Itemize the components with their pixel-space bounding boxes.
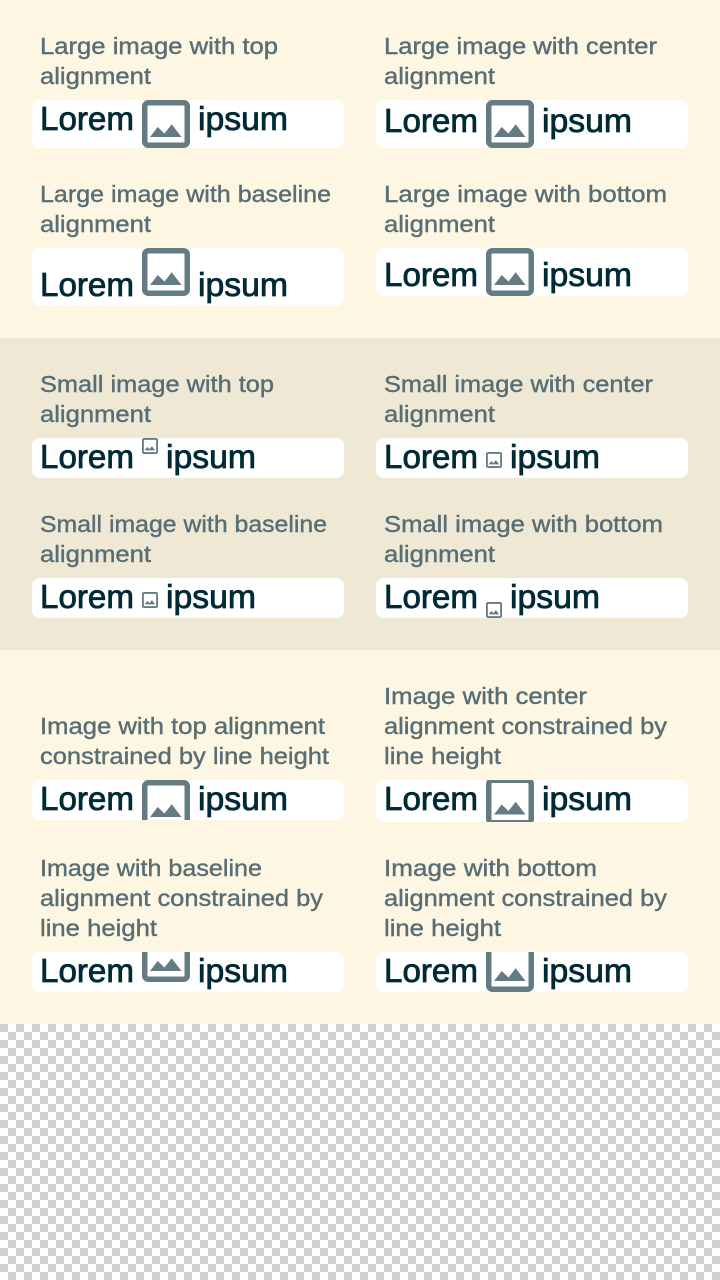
small baseline alignment sample bbox=[32, 578, 344, 618]
constrained center alignment label: line height bbox=[384, 743, 502, 769]
constrained top alignment sample bbox=[32, 780, 344, 825]
constrained center alignment label: alignment constrained by bbox=[384, 713, 668, 739]
small center alignment sample bbox=[376, 438, 688, 478]
large baseline alignment label: Large image with baseline bbox=[40, 181, 331, 207]
constrained bottom alignment sample: ipsum bbox=[542, 952, 632, 989]
constrained bottom alignment label: alignment constrained by bbox=[384, 885, 668, 911]
small bottom alignment label: alignment bbox=[384, 541, 496, 567]
constrained top alignment sample: Lorem bbox=[40, 780, 134, 817]
large center alignment sample: Lorem bbox=[384, 102, 478, 139]
panel: small images bbox=[0, 338, 720, 650]
constrained baseline alignment label: line height bbox=[40, 915, 158, 941]
large baseline alignment sample: ipsum bbox=[198, 266, 288, 303]
large baseline alignment sample bbox=[32, 248, 344, 306]
small center alignment sample: ipsum bbox=[510, 438, 600, 475]
small top alignment sample bbox=[32, 438, 344, 478]
small baseline alignment sample: Lorem bbox=[40, 578, 134, 615]
constrained baseline alignment label: alignment constrained by bbox=[40, 885, 324, 911]
constrained top alignment sample: ipsum bbox=[198, 780, 288, 817]
large top alignment sample bbox=[32, 100, 344, 148]
small baseline alignment label: alignment bbox=[40, 541, 152, 567]
large bottom alignment sample: ipsum bbox=[542, 256, 632, 293]
large top alignment label: alignment bbox=[40, 63, 152, 89]
large top alignment label: Large image with top bbox=[40, 33, 278, 59]
small bottom alignment label: Small image with bottom bbox=[384, 511, 663, 537]
large bottom alignment sample bbox=[376, 248, 688, 296]
large center alignment sample bbox=[376, 100, 688, 148]
small baseline alignment label: Small image with baseline bbox=[40, 511, 327, 537]
panel: large images bbox=[0, 0, 720, 338]
large center alignment sample: ipsum bbox=[542, 102, 632, 139]
small bottom alignment sample: Lorem bbox=[384, 578, 478, 615]
constrained center alignment sample: Lorem bbox=[384, 780, 478, 817]
constrained baseline alignment label: Image with baseline bbox=[40, 855, 262, 881]
small top alignment label: alignment bbox=[40, 401, 152, 427]
large center alignment label: Large image with center bbox=[384, 33, 657, 59]
small top alignment sample: Lorem bbox=[40, 438, 134, 475]
large bottom alignment label: Large image with bottom bbox=[384, 181, 667, 207]
small center alignment sample: Lorem bbox=[384, 438, 478, 475]
large bottom alignment sample: Lorem bbox=[384, 256, 478, 293]
constrained center alignment sample: ipsum bbox=[542, 780, 632, 817]
panel: images constrained by line height bbox=[0, 650, 720, 1024]
small top alignment label: Small image with top bbox=[40, 371, 274, 397]
constrained bottom alignment sample: Lorem bbox=[384, 952, 478, 989]
small bottom alignment sample: ipsum bbox=[510, 578, 600, 615]
constrained bottom alignment label: Image with bottom bbox=[384, 855, 597, 881]
constrained center alignment label: Image with center bbox=[384, 683, 587, 709]
constrained center alignment sample bbox=[376, 780, 688, 823]
small center alignment label: Small image with center bbox=[384, 371, 653, 397]
checkerboard background bbox=[0, 1024, 720, 1280]
small center alignment label: alignment bbox=[384, 401, 496, 427]
large top alignment sample: Lorem bbox=[40, 100, 134, 137]
small bottom alignment sample bbox=[376, 578, 688, 618]
constrained top alignment label: constrained by line height bbox=[40, 743, 330, 769]
small top alignment sample: ipsum bbox=[166, 438, 256, 475]
constrained bottom alignment label: line height bbox=[384, 915, 502, 941]
large center alignment label: alignment bbox=[384, 63, 496, 89]
large baseline alignment sample: Lorem bbox=[40, 266, 134, 303]
large baseline alignment label: alignment bbox=[40, 211, 152, 237]
constrained top alignment label: Image with top alignment bbox=[40, 713, 326, 739]
large bottom alignment label: alignment bbox=[384, 211, 496, 237]
constrained bottom alignment sample bbox=[376, 947, 688, 992]
constrained baseline alignment sample: Lorem bbox=[40, 952, 134, 989]
large top alignment sample: ipsum bbox=[198, 100, 288, 137]
constrained baseline alignment sample: ipsum bbox=[198, 952, 288, 989]
small baseline alignment sample: ipsum bbox=[166, 578, 256, 615]
constrained baseline alignment sample bbox=[32, 937, 344, 992]
